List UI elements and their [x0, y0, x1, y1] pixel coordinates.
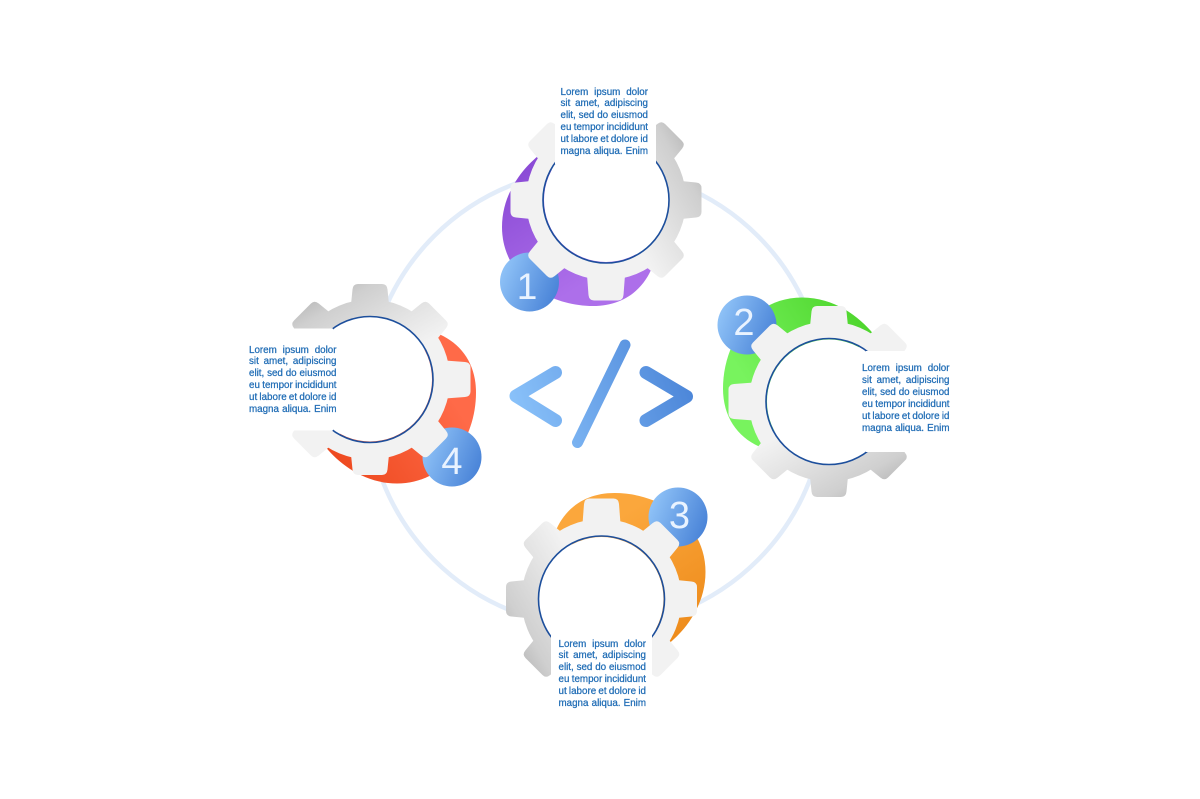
- badge 1: 1: [517, 266, 537, 307]
- text block 3: sit amet, adipiscing: [558, 650, 646, 661]
- text block 1: magna aliqua. Enim: [560, 146, 648, 157]
- text backing 4: [244, 328, 333, 430]
- text block 2: ut labore et dolore id: [862, 411, 950, 422]
- gear 1: [510, 122, 702, 300]
- badge 3: 3: [669, 495, 690, 537]
- text block 3: ut labore et dolore id: [558, 686, 646, 697]
- gear step 3: [506, 488, 708, 677]
- text block 2: sit amet, adipiscing: [862, 375, 950, 386]
- text block 3: Lorem ipsum dolor: [558, 638, 646, 650]
- text block 2: Lorem ipsum dolor: [862, 363, 950, 374]
- text block 1: [560, 86, 648, 157]
- text block 3: [558, 638, 646, 709]
- gear 3: [506, 498, 697, 677]
- badge 3: [648, 488, 708, 546]
- gear 4: [292, 284, 470, 475]
- text backing 3: [551, 635, 652, 719]
- text block 3: elit, sed do eiusmod: [558, 662, 646, 673]
- icon: right chevron: [646, 372, 686, 420]
- text block 4: Lorem ipsum dolor: [249, 344, 336, 356]
- text block 4: eu tempor incididunt: [249, 380, 336, 391]
- text block 2: eu tempor incididunt: [862, 399, 950, 410]
- text block 1: sit amet, adipiscing: [560, 98, 648, 109]
- badge 2: 2: [733, 302, 755, 344]
- green blob: [723, 298, 891, 464]
- badge 4: [422, 428, 482, 486]
- text backing 1: [555, 80, 656, 164]
- purple blob: [502, 138, 668, 306]
- badge 2: [718, 296, 776, 354]
- icon: slash: [578, 345, 625, 442]
- badge 4: 4: [441, 441, 463, 483]
- icon: left chevron: [516, 372, 556, 420]
- gear step 1: [500, 122, 702, 312]
- connecting ring: [367, 169, 825, 627]
- gear step 4: [292, 284, 482, 486]
- text block 2: elit, sed do eiusmod: [862, 387, 950, 398]
- text block 3: eu tempor incididunt: [558, 674, 646, 685]
- red blob: [308, 318, 476, 484]
- gear 2: [728, 306, 907, 497]
- text block 4: sit amet, adipiscing: [249, 356, 336, 367]
- badge 1: [500, 252, 559, 312]
- orange blob: [540, 493, 706, 661]
- text block 1: elit, sed do eiusmod: [560, 110, 648, 121]
- text backing 2: [866, 351, 956, 452]
- text block 1: ut labore et dolore id: [560, 134, 648, 145]
- code icon: [516, 345, 686, 442]
- text block 4: magna aliqua. Enim: [249, 404, 336, 415]
- text block 2: magna aliqua. Enim: [862, 423, 950, 434]
- text block 4: ut labore et dolore id: [249, 392, 336, 403]
- text block 3: magna aliqua. Enim: [558, 698, 646, 709]
- gear step 2: [718, 296, 907, 497]
- text block 4: elit, sed do eiusmod: [249, 368, 336, 379]
- text block 4: [249, 344, 337, 415]
- text block 1: eu tempor incididunt: [560, 122, 648, 133]
- text block 2: [862, 363, 950, 434]
- text block 1: Lorem ipsum dolor: [560, 86, 648, 98]
